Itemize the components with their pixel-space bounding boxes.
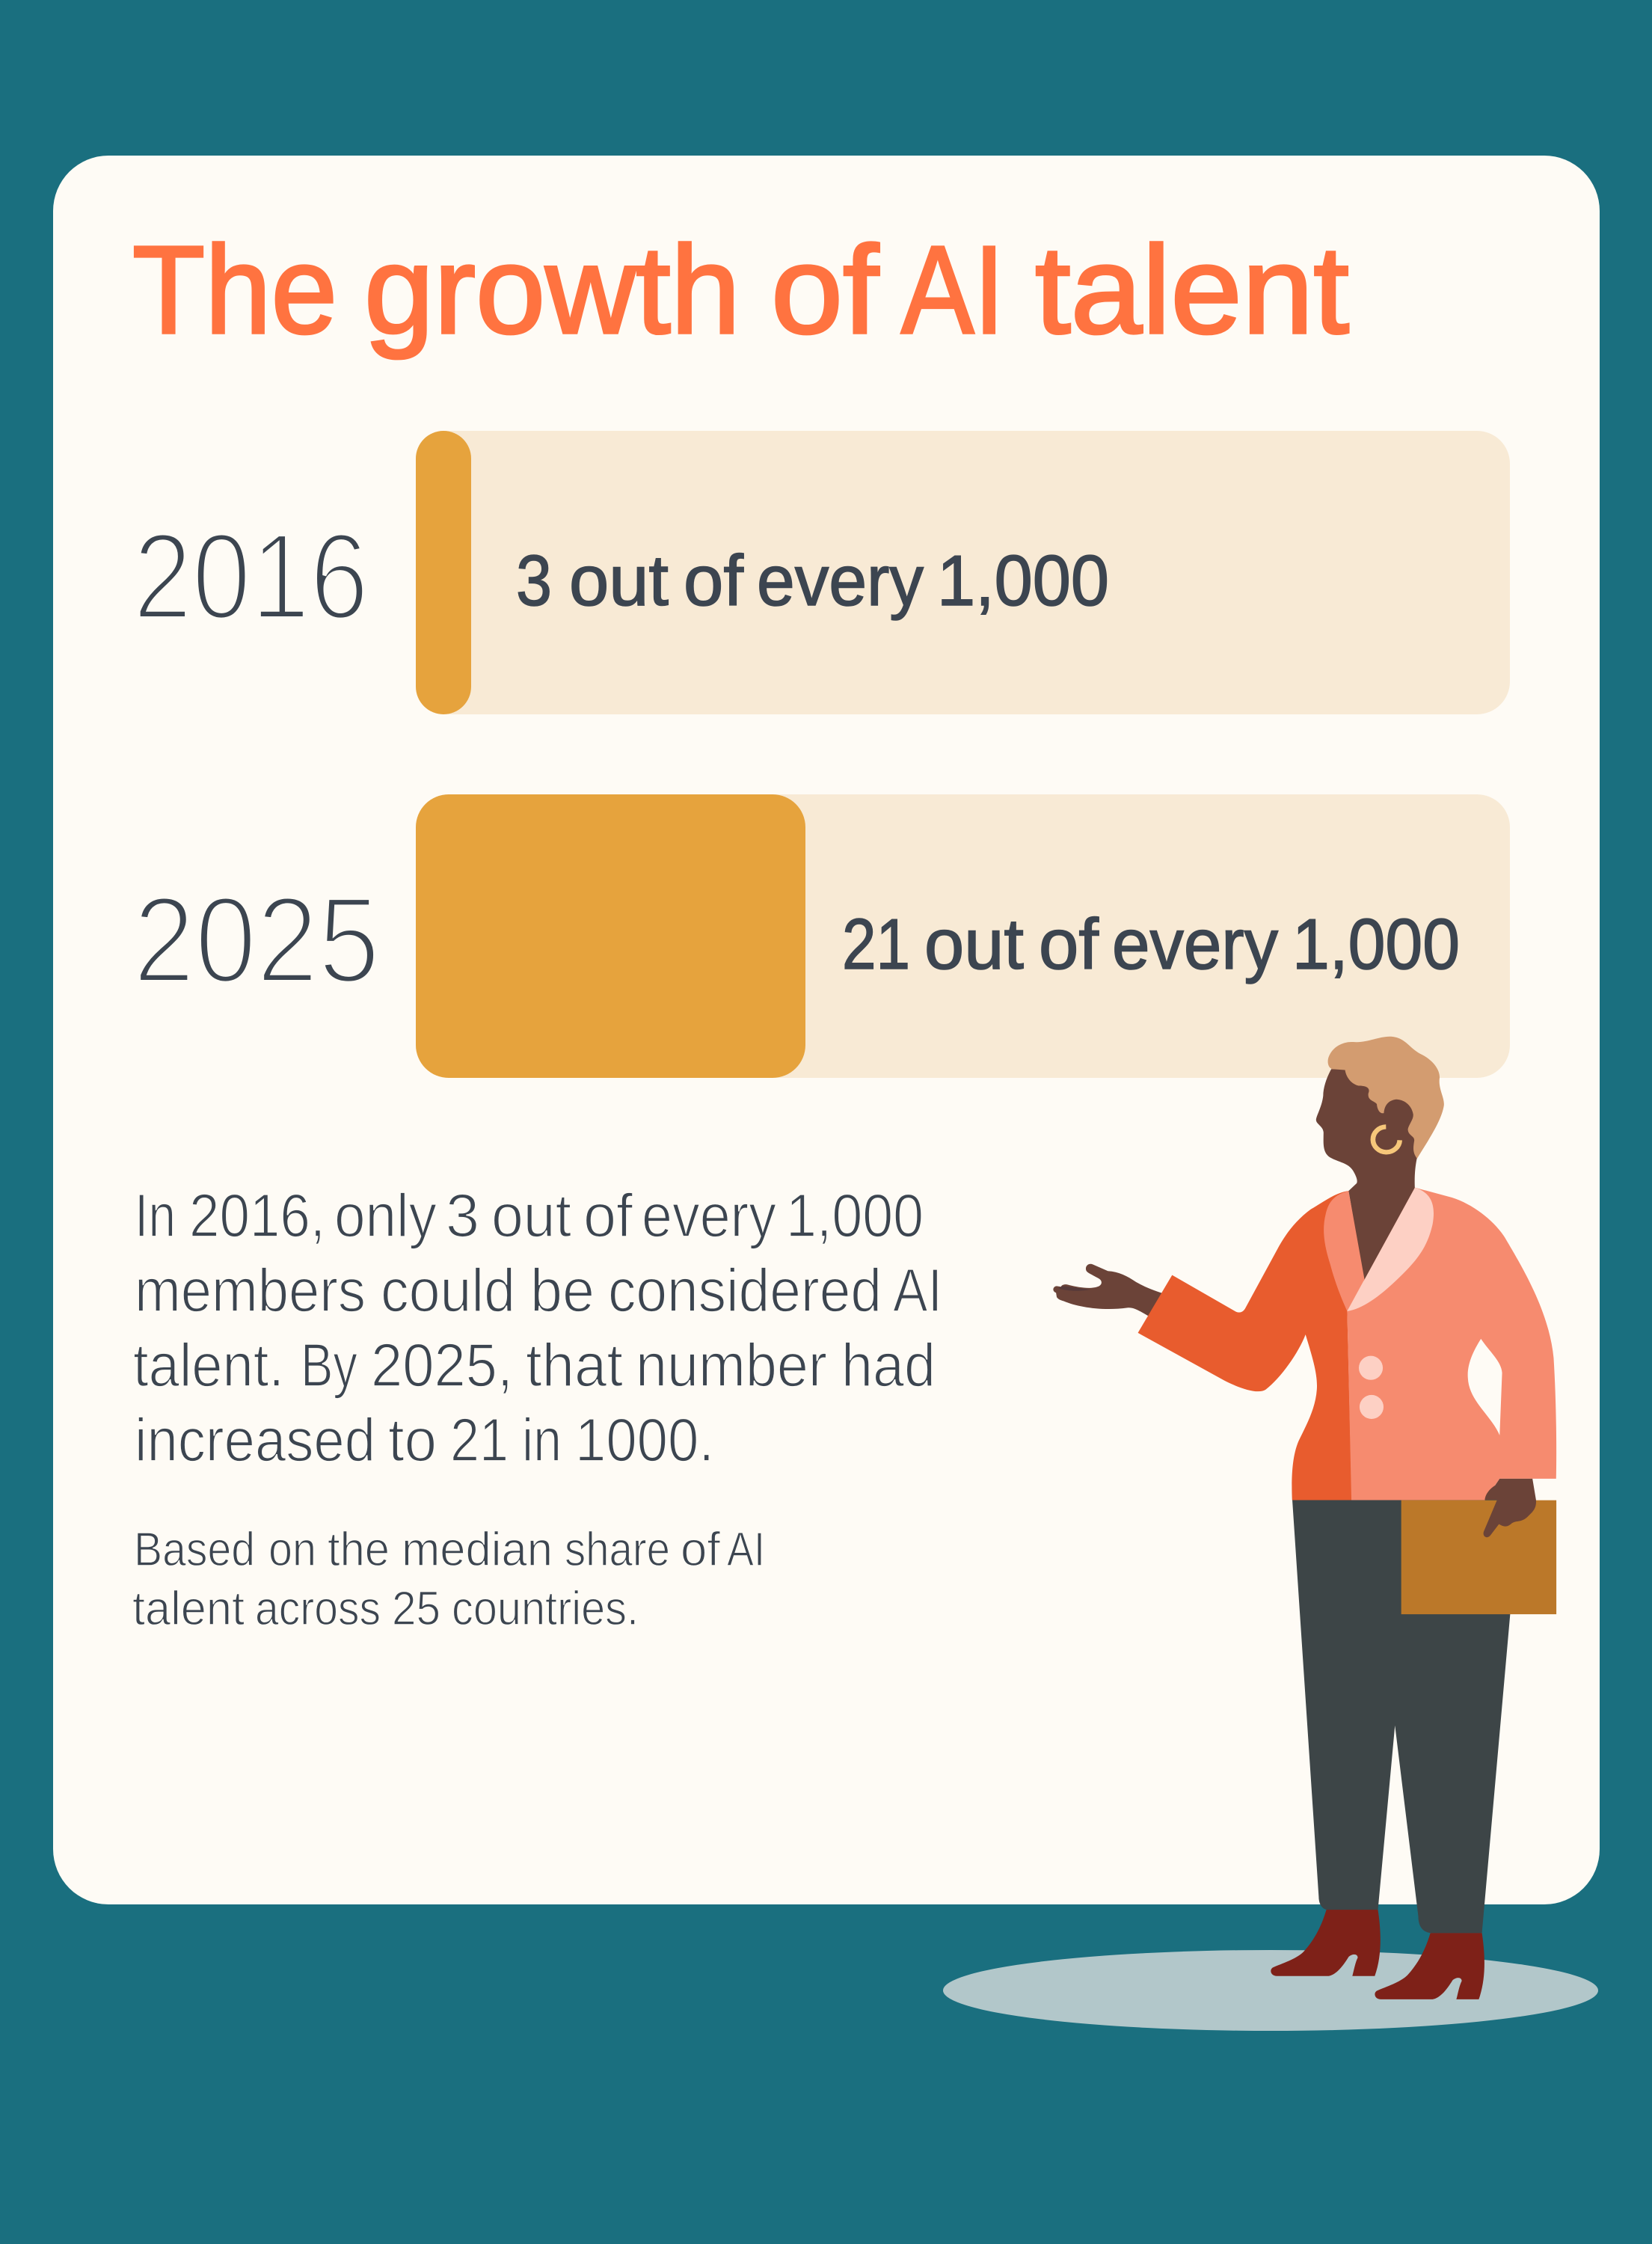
body text	[133, 1182, 942, 1474]
footnote: Based	[134, 1522, 255, 1576]
body text: members	[135, 1257, 366, 1325]
body text: 2025,	[371, 1331, 513, 1400]
bar label 2025: every	[1112, 904, 1278, 984]
jacket: shaded side	[1138, 1191, 1352, 1500]
bar label 2016: out	[569, 541, 669, 621]
finger shading	[1058, 1286, 1090, 1291]
bar label 2016: every	[757, 541, 924, 621]
head and neck	[1316, 1067, 1420, 1284]
boot: front	[1375, 1933, 1484, 1999]
footnote: share	[565, 1522, 670, 1576]
body text: to	[388, 1406, 437, 1474]
folder	[1401, 1500, 1556, 1614]
footnote: of	[681, 1522, 720, 1576]
title: growth	[364, 221, 740, 360]
year label 2025: 2025	[133, 871, 380, 1008]
body text: talent.	[133, 1331, 284, 1400]
illustration: presenter figure	[943, 1037, 1598, 2031]
bar label 2025: out	[924, 904, 1024, 984]
body text: 2016,	[189, 1182, 325, 1250]
body text: be	[530, 1257, 595, 1325]
bar fill 2025	[416, 794, 805, 1078]
bar track 2016	[416, 431, 1510, 714]
footnote: across	[255, 1581, 381, 1635]
body text: 3	[446, 1182, 479, 1250]
body text: every	[642, 1182, 776, 1250]
footnote: 25	[392, 1581, 440, 1635]
lapel: right	[1347, 1188, 1434, 1311]
footnote: countries.	[452, 1581, 639, 1635]
bar label 2016: 1,000	[937, 541, 1109, 621]
trousers	[1292, 1500, 1514, 1933]
button: upper	[1359, 1356, 1383, 1380]
lowered hand	[1484, 1479, 1536, 1537]
gap between arm and torso	[1468, 1339, 1502, 1435]
jacket: lit side	[1347, 1188, 1556, 1500]
body text: only	[334, 1182, 437, 1250]
footnote: on	[268, 1522, 316, 1576]
footnote: median	[402, 1522, 553, 1576]
earring	[1373, 1126, 1400, 1152]
boot: back	[1271, 1910, 1381, 1976]
year label 2016: 2016	[133, 508, 369, 645]
bar label 2025	[842, 904, 1460, 984]
bar fill 2016	[416, 431, 471, 714]
body text: out	[491, 1182, 571, 1250]
body text: AI	[893, 1257, 942, 1325]
body text: considered	[608, 1257, 882, 1325]
body text: 21	[450, 1406, 509, 1474]
upper body	[1053, 1037, 1556, 1537]
footnote: AI	[727, 1522, 765, 1576]
title	[132, 221, 1349, 360]
body text: 1000.	[575, 1406, 714, 1474]
bar label 2025: of	[1039, 904, 1099, 984]
bar label 2016: 3	[516, 541, 552, 621]
outstretched hand	[1053, 1264, 1164, 1317]
footnote: the	[328, 1522, 390, 1576]
title: The	[132, 221, 337, 360]
body text: number	[636, 1331, 827, 1400]
body text: that	[526, 1331, 623, 1400]
lapel: left	[1324, 1191, 1365, 1311]
body text: of	[583, 1182, 633, 1250]
bar label 2016	[516, 541, 1109, 621]
bar track 2025	[416, 794, 1510, 1078]
button: lower	[1360, 1395, 1384, 1419]
body text: 1,000	[786, 1182, 924, 1250]
title: AI	[901, 221, 1004, 360]
body text: In	[135, 1182, 176, 1250]
bar label 2025: 1,000	[1292, 904, 1460, 984]
bar label 2025: 21	[842, 904, 910, 984]
title: of	[771, 221, 879, 360]
title: talent	[1035, 221, 1349, 360]
footnote: talent	[132, 1581, 245, 1635]
body text: could	[381, 1257, 515, 1325]
panel: main card	[53, 156, 1600, 1904]
footnote	[132, 1522, 765, 1635]
body text: in	[522, 1406, 562, 1474]
bar label 2016: of	[684, 541, 743, 621]
hair	[1328, 1037, 1444, 1159]
row: 2025	[133, 794, 1510, 1078]
body text: had	[841, 1331, 936, 1400]
body text: By	[301, 1331, 357, 1400]
lower body	[1271, 1500, 1556, 1999]
ground shadow	[943, 1950, 1598, 2031]
row: 2016	[133, 431, 1510, 714]
body text: increased	[135, 1406, 375, 1474]
